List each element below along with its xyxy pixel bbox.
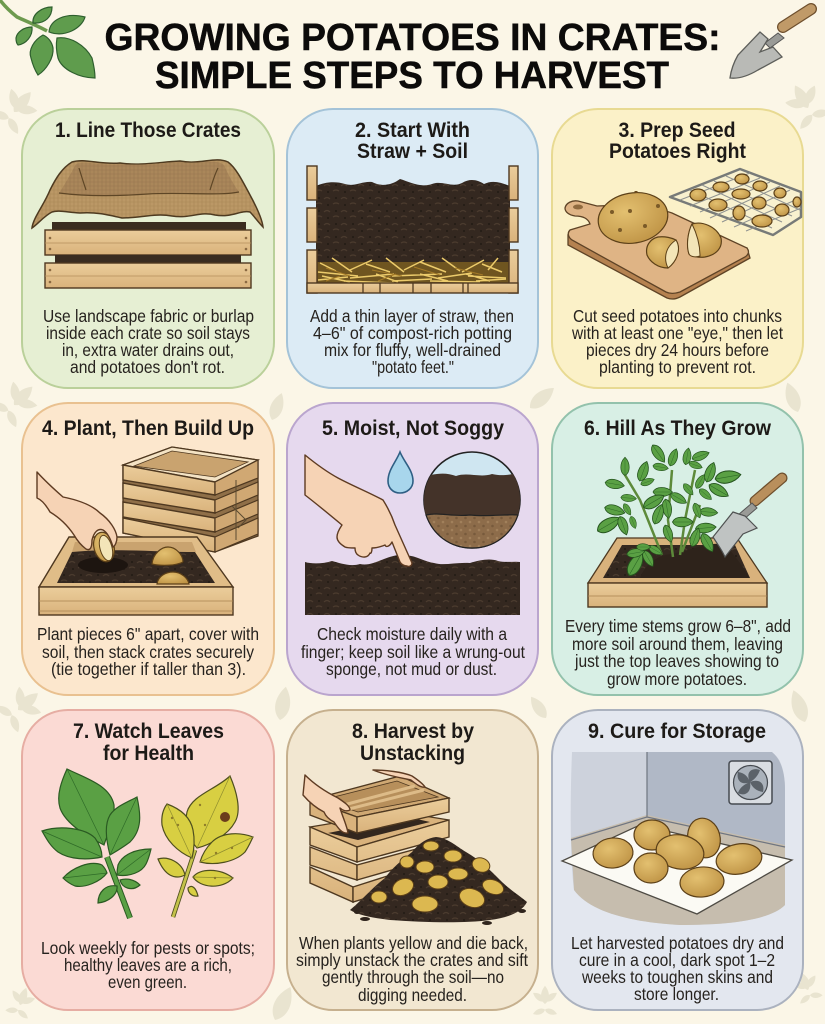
text: step 3 [571, 306, 783, 377]
text: step 3: Cut seed potatoes into chunks [573, 306, 782, 326]
heading: step 4: 4. Plant, Then Build Up [42, 417, 254, 440]
text: step 5 [301, 624, 525, 679]
text: step 4 [37, 624, 259, 679]
illustration: straw and soil layers [307, 166, 518, 293]
text: step 8: When plants yellow and die back, [299, 933, 528, 953]
illustration: lifted empty crate with hands [303, 770, 449, 833]
text: step 3: pieces dry 24 hours before [586, 340, 769, 360]
text: step 7: healthy leaves are a rich, [64, 955, 232, 975]
illustration: soil strip [305, 555, 520, 615]
text: step 2: "potato feet." [372, 357, 454, 377]
illustration: healthy green leaf [42, 769, 151, 918]
text: step 4: Plant pieces 6" apart, cover with [37, 624, 259, 644]
heading: step 6: 6. Hill As They Grow [584, 417, 772, 440]
text: step 1: inside each crate so soil stays [46, 323, 250, 343]
icon: garden trowel [730, 9, 811, 78]
heading: step 3 [609, 119, 746, 163]
text: step 9: store longer. [634, 984, 719, 1004]
text: step 1 [43, 306, 254, 377]
panel: step 6 [552, 403, 803, 695]
text: step 2: Add a thin layer of straw, then [310, 306, 514, 326]
text: step 8 [296, 933, 528, 1005]
text: step 4: (tie together if taller than 3). [51, 659, 246, 679]
text: step 8: simply unstack the crates and sift [296, 950, 528, 970]
panel: step 3 [552, 109, 803, 388]
text: step 9: Let harvested potatoes dry and [571, 933, 784, 953]
illustration: stacked crates [123, 447, 258, 552]
text: step 9: weeks to toughen skins and [581, 967, 773, 987]
icon: water drop [388, 452, 413, 493]
panel: step 8 [287, 710, 538, 1010]
text: step 2: 4–6" of compost-rich potting [313, 323, 512, 343]
heading: step 1: 1. Line Those Crates [55, 119, 241, 142]
heading: step 5: 5. Moist, Not Soggy [322, 417, 504, 440]
title: GROWING POTATOES IN CRATES: [104, 17, 720, 59]
heading: step 8: 8. Harvest by [352, 720, 474, 743]
panel: step 7 [22, 710, 274, 1010]
text: step 7: even green. [108, 972, 187, 992]
heading: step 2: Straw + Soil [357, 140, 468, 163]
illustration: hand placing seed potato [37, 472, 118, 564]
illustration: towel [562, 825, 792, 914]
panel: step 4 [22, 403, 274, 695]
text: step 8: gently through the soil—no [322, 967, 504, 987]
text: step 5: finger; keep soil like a wrung-out [301, 642, 525, 662]
text: step 2 [310, 306, 514, 377]
illustration: cutting board with potatoes [565, 187, 750, 299]
text: step 1: and potatoes don't rot. [70, 357, 225, 377]
illustration: finger testing soil [305, 455, 412, 566]
panel: step 1 [22, 109, 274, 388]
text: step 3: with at least one "eye," then let [571, 323, 783, 343]
text: step 9 [571, 933, 784, 1004]
heading: step 3: Potatoes Right [609, 140, 746, 163]
text: step 4: soil, then stack crates securely [42, 642, 254, 662]
panel: step 9 [552, 710, 803, 1010]
text: step 7 [41, 938, 255, 992]
illustration: burlap-lined crate [32, 160, 263, 288]
illustration: stacked lower crates [310, 812, 449, 902]
heading: step 2 [355, 119, 470, 163]
illustration: base crate with soil [39, 537, 233, 615]
illustration: rack of drying chunks [670, 169, 801, 235]
heading: step 2: 2. Start With [355, 119, 470, 142]
illustration: soil pile with potatoes [350, 837, 527, 925]
illustration: crate with soil [588, 538, 767, 607]
heading: step 8 [352, 720, 474, 765]
icon: top-left leaf branch [0, 0, 95, 78]
icon: hand trowel in soil [713, 478, 782, 557]
panel: step 2 [287, 109, 538, 388]
heading: step 7: for Health [103, 742, 194, 765]
icon: wall vent fan [729, 761, 772, 804]
text: step 6: grow more potatoes. [607, 669, 747, 689]
text: step 6: more soil around them, leaving [572, 634, 783, 654]
text: step 5: Check moisture daily with a [317, 624, 507, 644]
heading: step 8: Unstacking [360, 742, 465, 765]
panel: step 5 [287, 403, 538, 695]
text: step 7: Look weekly for pests or spots; [41, 938, 255, 958]
illustration: room corner [571, 752, 785, 925]
illustration: potato plant [595, 442, 742, 578]
heading: step 9: 9. Cure for Storage [588, 720, 766, 743]
text: step 3: planting to prevent rot. [599, 357, 756, 377]
illustration: soil cross-section circle [424, 452, 520, 548]
text: step 9: cure in a cool, dark spot 1–2 [579, 950, 775, 970]
text: step 1: Use landscape fabric or burlap [43, 306, 254, 326]
title: SIMPLE STEPS TO HARVEST [155, 55, 669, 97]
text: step 5: sponge, not mud or dust. [326, 659, 497, 679]
title [104, 17, 720, 97]
text: step 6: just the top leaves showing to [574, 651, 779, 671]
illustration: curing potatoes [592, 815, 764, 899]
text: step 2: mix for fluffy, well-drained [324, 340, 501, 360]
heading: step 7 [73, 720, 224, 765]
text: step 6 [565, 616, 791, 689]
heading: step 7: 7. Watch Leaves [73, 720, 224, 743]
illustration: yellowing spotted leaf [158, 776, 253, 917]
text: step 6: Every time stems grow 6–8", add [565, 616, 791, 636]
text: step 8: digging needed. [358, 985, 467, 1005]
heading: step 3: 3. Prep Seed [618, 119, 736, 142]
text: step 1: in, extra water drains out, [62, 340, 234, 360]
